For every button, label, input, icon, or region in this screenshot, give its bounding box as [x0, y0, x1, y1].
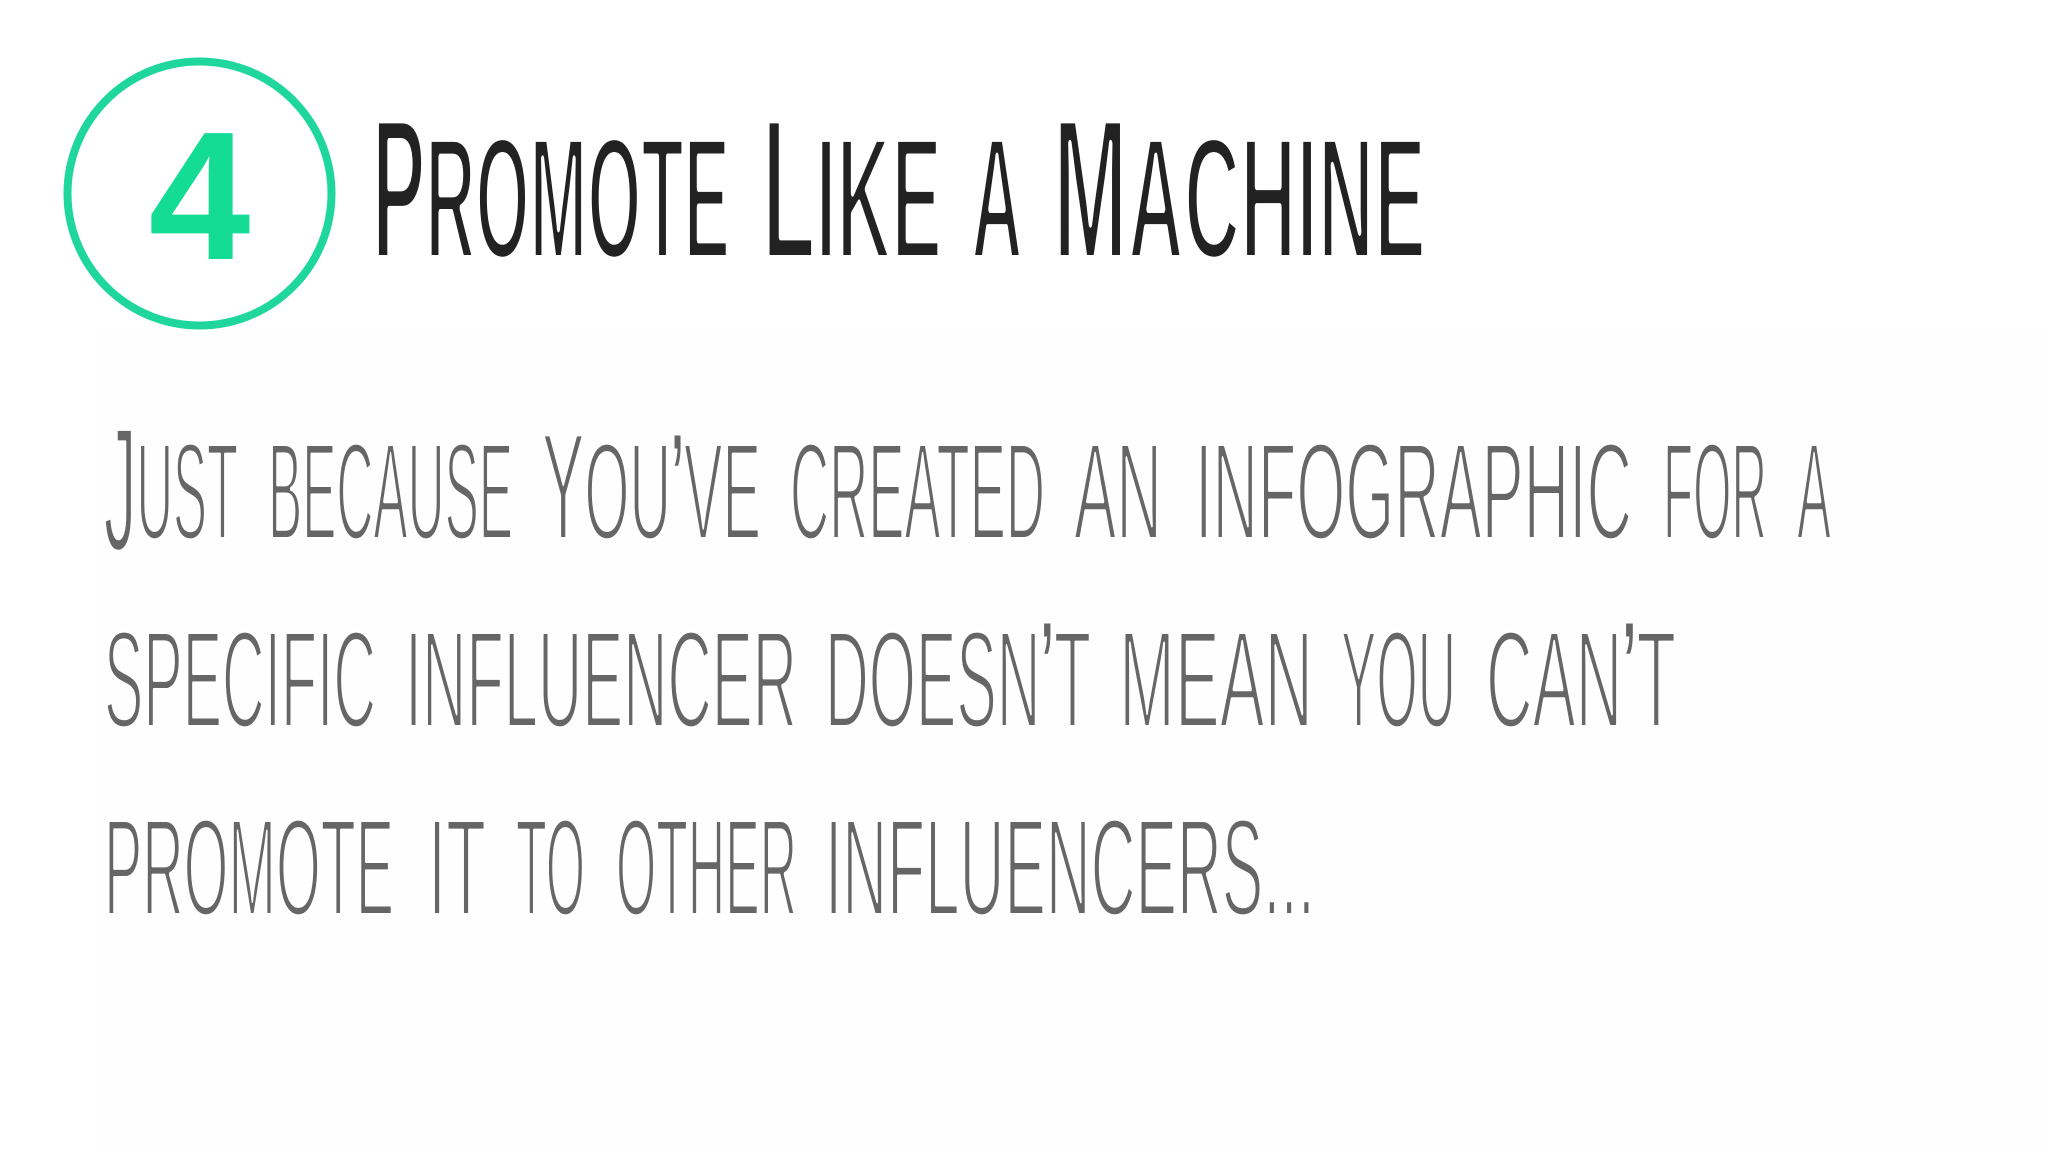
- badge ring: [68, 62, 332, 326]
- body line 1: ’: [671, 412, 684, 535]
- body line 2: SPECIFIC: [104, 603, 376, 757]
- body line 1: J: [104, 392, 136, 588]
- body line 2: [104, 600, 1676, 757]
- body text: T: [1637, 603, 1676, 757]
- body line 3: OTHER: [616, 791, 797, 945]
- body text: [104, 392, 1831, 945]
- title: LIKE: [762, 76, 942, 303]
- body line 1: VE: [684, 415, 761, 569]
- body line 1: FOR: [1663, 415, 1767, 569]
- body line 3: IT: [428, 791, 486, 945]
- body line 2: ’: [1041, 600, 1054, 723]
- slide: A: [1797, 415, 1831, 569]
- step number badge: [68, 62, 332, 326]
- body text: INFLUENCERS...: [825, 791, 1315, 945]
- badge number: 4: [149, 93, 250, 298]
- body line 2: T: [1054, 603, 1091, 757]
- body line 1: [104, 392, 1831, 588]
- faint off-white background panel: [95, 330, 2048, 1152]
- body line 1: BECAUSE: [268, 415, 513, 569]
- body line 3: PROMOTE: [104, 791, 394, 945]
- body line 2: INFLUENCER: [405, 603, 797, 757]
- body line 3: [104, 791, 1315, 945]
- body line 1: AN: [1074, 415, 1162, 569]
- body line 2: YOU: [1341, 603, 1456, 757]
- body line 2: CAN: [1486, 603, 1777, 757]
- body line 2: DOESN: [825, 603, 1316, 757]
- body line 1: UST: [136, 415, 238, 569]
- title: PROMOTE: [372, 76, 730, 303]
- body line 2: MEAN: [1119, 603, 1313, 757]
- body line 1: CREATED: [790, 415, 1045, 569]
- body line 2: ’: [1622, 600, 1637, 723]
- slide: MACHINE: [1053, 76, 1426, 303]
- body line 3: TO: [516, 791, 585, 945]
- title: A: [971, 101, 1023, 297]
- body line 1: YOU: [542, 402, 791, 572]
